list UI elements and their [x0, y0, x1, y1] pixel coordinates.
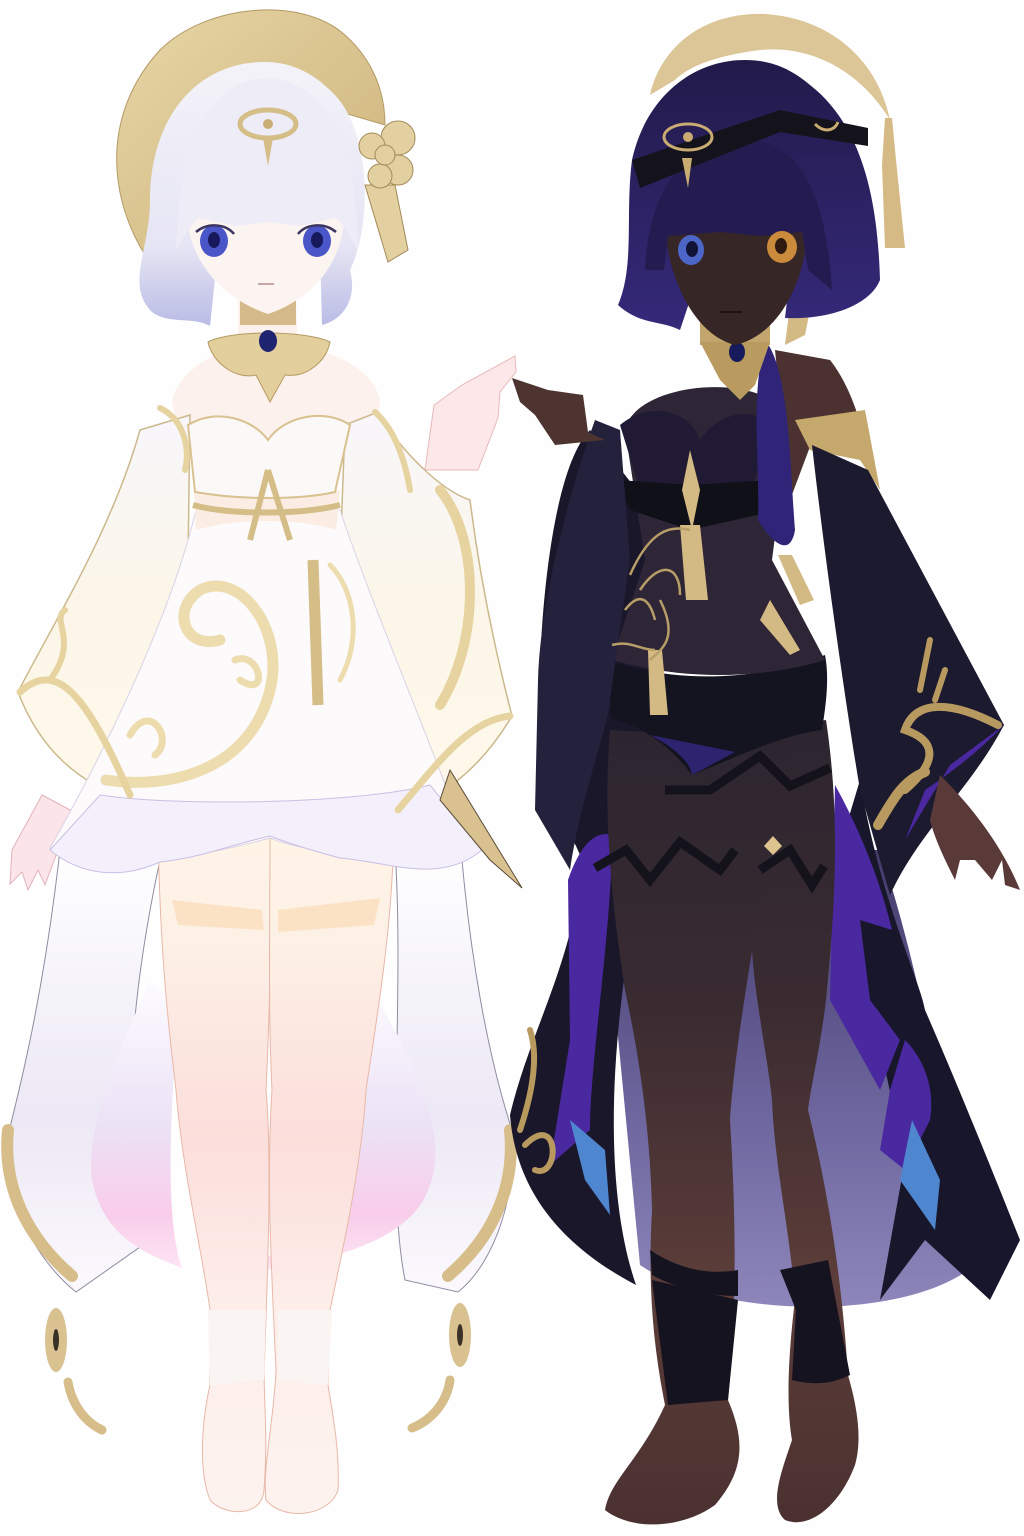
- shoulder arm right: [775, 350, 868, 500]
- right leg dark: [752, 720, 859, 1522]
- blue lining left: [570, 1120, 610, 1215]
- gold arm band: [795, 410, 880, 490]
- top: [620, 411, 770, 495]
- raised arm and hand: [425, 356, 516, 470]
- right sleeve gold embroidery: [878, 640, 998, 825]
- right dark sleeve: [812, 445, 1004, 895]
- trailing gold sleeve tip: [440, 770, 522, 888]
- gold crescent and tassel: [650, 14, 905, 248]
- gold cape embroidery: [520, 1030, 553, 1171]
- purple side braid: [757, 340, 795, 545]
- right lowered hand: [930, 775, 1020, 890]
- gold waist sash: [193, 470, 340, 705]
- bodice: [188, 416, 350, 498]
- white cape panels: [7, 850, 513, 1292]
- gold necklace: [208, 282, 330, 402]
- gold collar: [700, 285, 815, 400]
- character: dark-haired figure: [510, 14, 1020, 1524]
- gold hat dome: [117, 10, 385, 255]
- dark figure eyes: [678, 231, 797, 312]
- raised dark arm and hand: [512, 378, 605, 445]
- right leg: [265, 830, 394, 1513]
- left leg: [158, 830, 271, 1512]
- lavender cape interior dome: [600, 850, 968, 1307]
- right dark cape: [830, 780, 1020, 1300]
- midriff: [194, 490, 340, 530]
- right sleeve: [340, 412, 512, 812]
- character: white-haired figure: [7, 10, 522, 1513]
- shorts: [610, 655, 827, 775]
- thigh glow: [172, 898, 380, 932]
- sleeve purple inner: [905, 725, 1004, 840]
- pink hair ends: [91, 980, 435, 1272]
- gold sleeve embroidery: [20, 408, 510, 810]
- black headband with eye: [632, 110, 868, 188]
- neck and chest: [172, 300, 380, 445]
- forehead jewel: [240, 110, 296, 166]
- dark fringe: [645, 140, 832, 290]
- dark hair: [618, 60, 880, 330]
- left leg dark: [605, 730, 790, 1524]
- left dark cape: [510, 430, 660, 1285]
- gold tassels belt and web: [648, 450, 814, 715]
- thigh zigzag pattern: [595, 756, 830, 885]
- stocking tops: [650, 1250, 850, 1405]
- purple lining left: [550, 834, 612, 1165]
- white hair: [139, 62, 365, 326]
- face: [186, 179, 345, 314]
- purple lining right: [830, 785, 900, 1090]
- left sleeve: [18, 415, 190, 800]
- blue lining right: [900, 1120, 940, 1230]
- skirt: [50, 510, 470, 860]
- lowered hand: [10, 795, 74, 890]
- torso sheer: [612, 387, 825, 675]
- gold trim and tassels right: [412, 1130, 511, 1428]
- gold lace: [612, 528, 690, 660]
- black wrap: [618, 480, 780, 530]
- left wide sleeve: [535, 420, 630, 870]
- gold trim and tassels left: [7, 1130, 102, 1430]
- socks: [208, 1310, 332, 1385]
- dark face: [665, 206, 808, 345]
- gold flower ornament: [359, 121, 415, 262]
- diamond mark: [764, 836, 782, 855]
- frills: [50, 785, 482, 873]
- eyes: [196, 225, 336, 284]
- fringe: [176, 78, 358, 250]
- gold skirt embroidery: [106, 565, 353, 782]
